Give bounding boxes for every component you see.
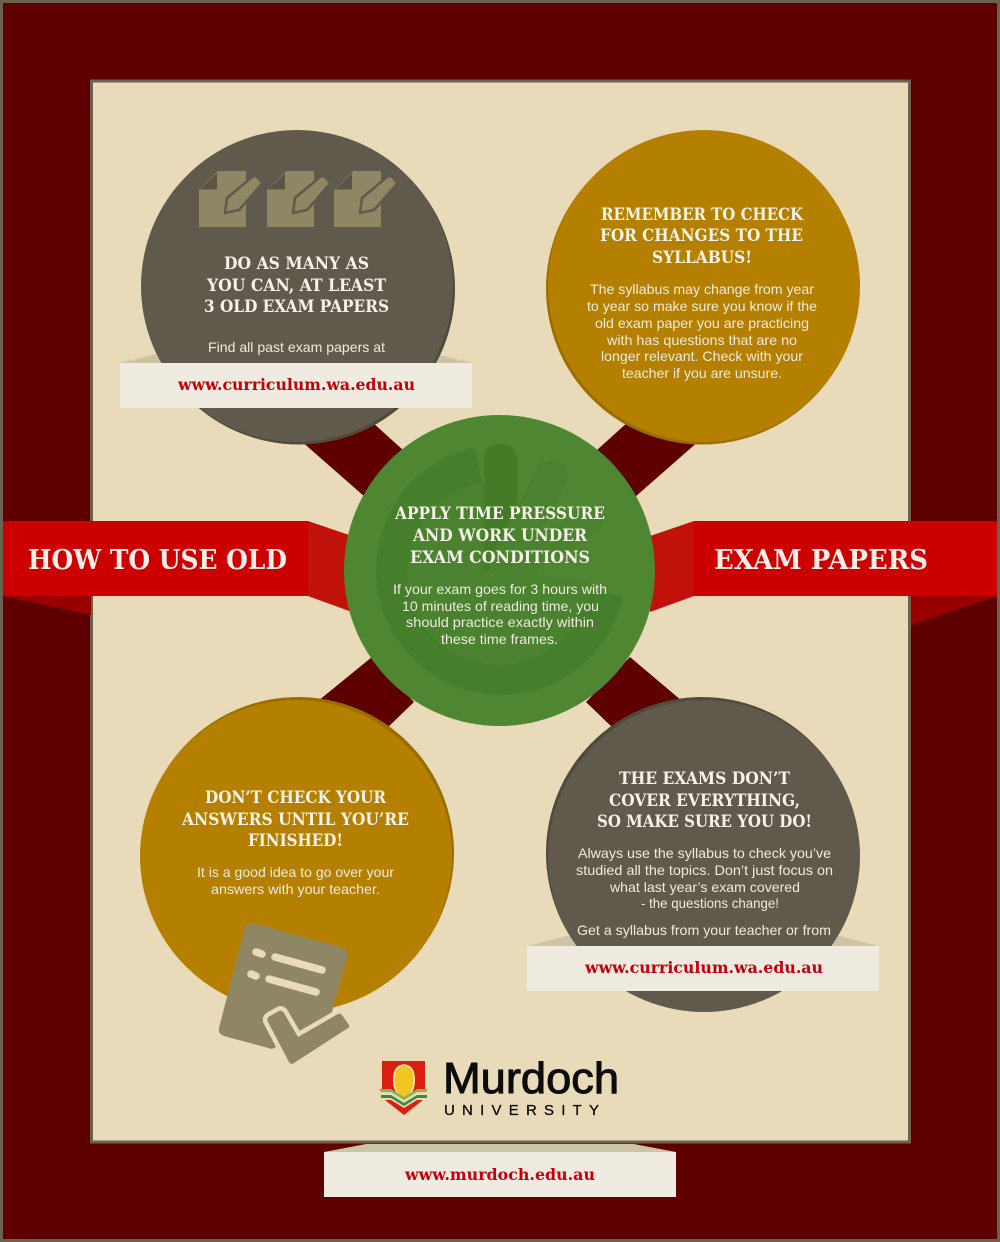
panel: old exam papers: [141, 130, 455, 444]
icon: checklist document with tick: [219, 923, 349, 1064]
heading: DO AS MANY AS: [224, 254, 369, 274]
heading: SO MAKE SURE YOU DO!: [597, 812, 812, 832]
text block: what last year’s exam covered: [609, 879, 800, 895]
title banner left: HOW TO USE OLD: [28, 545, 287, 576]
text block: [576, 845, 833, 938]
Murdoch University logo: UNIVERSITY: [444, 1102, 599, 1119]
text block: with has questions that are no: [606, 332, 797, 348]
link ribbon: curriculum bottom: [527, 946, 879, 991]
title banner left: [3, 521, 352, 615]
heading: [394, 504, 605, 568]
heading: AND WORK UNDER: [412, 526, 588, 546]
text block: Find all past exam papers at: [208, 339, 385, 355]
icon: crest: [379, 1061, 428, 1115]
ribbon fold: curriculum top: [120, 353, 472, 363]
heading: YOU CAN, AT LEAST: [206, 276, 386, 296]
text block: The syllabus may change from year: [590, 281, 814, 297]
heading: FINISHED!: [248, 831, 343, 851]
text block: Get a syllabus from your teacher or from: [577, 922, 831, 938]
heading: COVER EVERYTHING,: [609, 791, 800, 811]
panel: don't check answers: [140, 697, 454, 1012]
link ribbon: murdoch: [324, 1144, 676, 1197]
heading: DON’T CHECK YOUR: [205, 788, 387, 808]
icon: clock watermark: [376, 444, 623, 695]
text block: If your exam goes for 3 hours with: [393, 581, 607, 597]
title banner right: EXAM PAPERS: [714, 545, 928, 576]
ribbon fold: curriculum bottom: [527, 936, 879, 946]
text block: 10 minutes of reading time, you: [402, 598, 599, 614]
text block: answers with your teacher.: [211, 881, 380, 897]
link ribbon: murdoch: www.murdoch.edu.au: [404, 1165, 595, 1184]
icon: three papers with pencils: [199, 171, 397, 227]
text block: - the questions change!: [641, 895, 779, 911]
heading: 3 OLD EXAM PAPERS: [204, 297, 389, 317]
link ribbon: curriculum top: www.curriculum.wa.edu.au: [177, 375, 415, 394]
heading: REMEMBER TO CHECK: [601, 205, 804, 225]
cream centre panel: [92, 81, 910, 1142]
text block: these time frames.: [441, 631, 558, 647]
text block: to year so make sure you know if the: [587, 298, 817, 314]
wordmark: Murdoch: [443, 1054, 619, 1103]
heading: SYLLABUS!: [652, 248, 752, 268]
text block: [393, 581, 607, 647]
heading: EXAM CONDITIONS: [410, 548, 590, 568]
heading: [597, 769, 812, 832]
heading: FOR CHANGES TO THE: [600, 226, 803, 246]
heading: ANSWERS UNTIL YOU’RE: [181, 810, 409, 830]
text block: longer relevant. Check with your: [601, 348, 803, 364]
text block: studied all the topics. Don’t just focus on: [576, 862, 833, 878]
link ribbon: curriculum bottom: www.curriculum.wa.edu.au: [584, 958, 823, 977]
title banner right: [650, 521, 997, 625]
Murdoch University logo: [379, 1054, 619, 1119]
panel: exams don't cover everything: [546, 697, 860, 1012]
text block: should practice exactly within: [406, 614, 594, 630]
panel: syllabus changes: [546, 130, 860, 444]
heading: [600, 205, 804, 268]
text block: [197, 864, 394, 897]
connecting cross bands: [300, 422, 700, 730]
heading: THE EXAMS DON’T: [619, 769, 790, 789]
heading: APPLY TIME PRESSURE: [394, 504, 605, 524]
link ribbon: curriculum top: [120, 363, 472, 408]
text block: It is a good idea to go over your: [197, 864, 394, 880]
text block: [587, 281, 817, 381]
text block: Always use the syllabus to check you’ve: [578, 845, 831, 861]
text block: teacher if you are unsure.: [622, 365, 782, 381]
heading: [181, 788, 409, 851]
text block: old exam paper you are practicing: [595, 315, 809, 331]
panel: time pressure: [344, 415, 655, 726]
heading: [204, 254, 389, 317]
